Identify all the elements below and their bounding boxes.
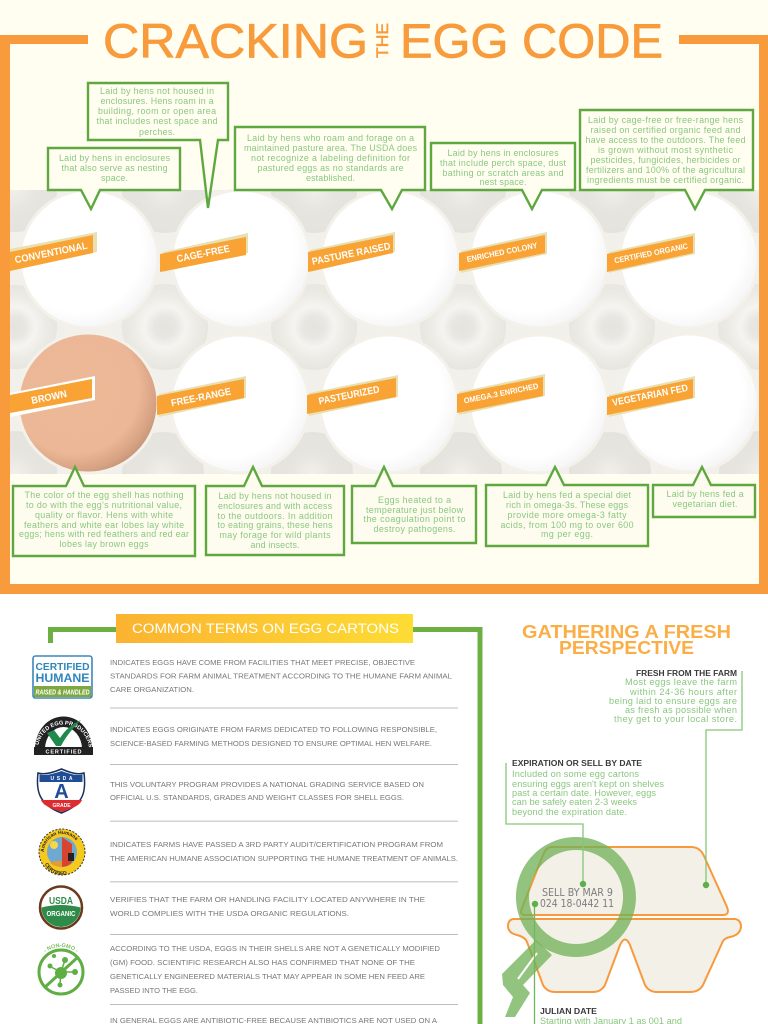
callout: free-range: and insects. [250,540,300,550]
icon: united egg producers certified: CERTIFIED [46,750,82,756]
text: fresh from the farm [609,669,737,724]
callout: cage-free: perches. [139,127,175,137]
ribbon: conventional: CONVENTIONAL [14,241,89,266]
callout: enriched colony: bathing or scratch areas and [442,168,564,178]
callout: certified organic: pesticides, fungicides, herbicides or [590,155,741,165]
heading: gathering a fresh perspective: GATHERING A FRESH [522,621,731,642]
callout: vegetarian fed: Laid by hens fed a [666,489,744,499]
text: fresh from the farm: Most eggs leave the farm [625,677,737,687]
heading: common terms on egg cartons: COMMON TERMS ON EGG CARTONS [132,621,399,636]
callout: pasture raised: established. [306,173,355,183]
icon: magnifying glass [502,837,636,1017]
title: CRACKING [103,16,368,68]
icon: non-gmo [38,943,84,996]
text: usda organic description: WORLD COMPLIES WITH THE USDA ORGANIC REGULATIONS. [110,909,349,918]
panel: common terms frame line [50,630,480,1024]
icon: certified humane: CERTIFIED [36,662,90,673]
text: expiration or sell by date: Included on some egg cartons [512,769,639,779]
callout: cage-free: building, room or open area [98,106,216,116]
text: united egg producers description: SCIENCE-BASED FARMING METHODS DESIGNED TO ENSURE OPTIMAL HEN WELFARE. [110,739,432,748]
text: fresh from the farm: they get to your local store. [614,714,737,724]
text: certified humane description: CARE ORGANIZATION. [110,685,194,694]
ribbon: free-range [157,376,246,417]
icon: american humane certified seal: CERTIFIED [45,863,66,875]
icon: united egg producers certified: UNITED EGG PRODUCERS [35,720,92,748]
ribbon: pasteurized [307,375,398,416]
title: EGG CODE [400,16,663,68]
callout: omega-3 enriched [486,467,648,546]
ribbon: vegetarian fed: VEGETARIAN FED [611,383,689,409]
callout: pasture raised: pastured eggs as no standards are [258,163,404,173]
callout: certified organic: ingredients must be certified organic. [587,175,744,185]
callout: cage-free: enclosures. Hens roam in a [100,96,214,106]
connector: julian date [532,901,538,1024]
text: usda organic description [110,895,425,918]
callout: pasture raised [235,127,425,209]
text: julian date: JULIAN DATE [540,1007,598,1016]
icon: usda grade a shield: GRADE [52,803,71,809]
callout: pasteurized: temperature just below [366,505,464,515]
callout: brown: lobes lay brown eggs [60,539,149,549]
text: carton date stamp [540,887,614,910]
ribbon: pasteurized: PASTEURIZED [318,384,381,408]
callout: certified organic [580,110,753,209]
ribbon: enriched colony [459,232,547,273]
heading: common terms on egg cartons [116,614,413,643]
text: non-gmo description: ACCORDING TO THE USDA, EGGS IN THEIR SHELLS ARE NOT A GENETICALLY MODIFIED [110,944,440,953]
orange frame [0,35,768,594]
callout: enriched colony: that include perch space, dust [440,158,567,168]
callout: pasture raised: Laid by hens who roam and forage on a [247,133,414,143]
text: fresh from the farm: FRESH FROM THE FARM [636,669,737,678]
ribbon: cage-free [160,233,248,272]
icon: certified humane [33,656,92,698]
callout: conventional: that also serve as nesting [62,163,168,173]
callout: brown: to do with the egg's nutritional value, [26,500,182,510]
callout: brown: The color of the egg shell has nothing [24,490,184,500]
icon: usda organic seal [40,886,82,928]
callout: free-range [206,467,344,555]
text: fresh from the farm: within 24-36 hours after [629,687,737,697]
ribbon: brown: BROWN [30,389,68,407]
text: carton date stamp: SELL BY MAR 9 [542,887,613,899]
text: certified humane description [110,658,452,694]
icon: certified humane: RAISED & HANDLED [36,690,90,696]
callout: enriched colony: Laid by hens in enclosures [448,148,559,158]
callout: enriched colony [431,143,575,209]
callout: brown: feathers and white ear lobes lay white [24,520,184,530]
callout: conventional: space. [101,173,128,183]
callout: free-range: Laid by hens not housed in [218,491,332,501]
text: united egg producers description: INDICATES EGGS ORIGINATE FROM FARMS DEDICATED TO FOLLOWING RESPONSIBLE, [110,725,437,734]
heading: gathering a fresh perspective [522,621,731,658]
ribbon: conventional [10,232,97,271]
ribbon: free-range: FREE-RANGE [170,386,232,409]
text: usda grade description: THIS VOLUNTARY PROGRAM PROVIDES A NATIONAL GRADING SERVICE BASED ON [110,780,424,789]
text: certified humane description: STANDARDS FOR FARM ANIMAL TREATMENT ACCORDING TO THE HUMANE FARM ANIMAL [110,672,452,680]
text: expiration or sell by date: EXPIRATION OR SELL BY DATE [512,759,643,768]
callout: certified organic: is grown without most synthetic [598,145,734,155]
callout: cage-free: that includes nest space and [96,116,218,126]
text: non-gmo description: GENETICALLY ENGINEERED MATERIALS THAT MAY APPEAR IN SOME HEN FEED ARE [110,972,425,981]
text: non-gmo description: PASSED INTO THE EGG. [110,986,198,995]
icon: american humane certified seal [38,828,86,876]
callout: free-range: enclosures and with access [218,501,333,511]
ribbon: certified organic [607,233,695,273]
callout: certified organic: have access to the outdoors. The feed [586,135,746,145]
callout: omega-3 enriched: Laid by hens fed a special diet [503,490,632,500]
ribbon: omega-3 enriched [457,374,545,415]
text: carton date stamp: 024 18-0442 11 [540,898,614,910]
text: usda grade description [110,780,424,802]
text: american humane description: INDICATES FARMS HAVE PASSED A 3RD PARTY AUDIT/CERTIFICATION PROGRAM FROM [110,840,443,849]
ribbon: cage-free: CAGE-FREE [176,244,231,265]
callout: conventional: Laid by hens in enclosures [59,153,171,163]
callout: pasteurized: Eggs heated to a [378,495,451,505]
callout: vegetarian fed: vegetarian diet. [672,499,738,509]
callout: pasteurized: destroy pathogens. [374,524,456,534]
text: expiration or sell by date: ensuring eggs aren't kept on shelves [512,779,664,789]
title: THE [373,23,392,58]
text: usda organic description: VERIFIES THAT THE FARM OR HANDLING FACILITY LOCATED ANYWHERE IN THE [110,895,425,904]
text: julian date [540,1007,682,1024]
icon: united egg producers certified [34,716,93,756]
text: expiration or sell by date: past a certain date. However, eggs [512,788,656,798]
callout: free-range: to eating grains, these hens [218,520,333,530]
callout: brown: quality or flavor. Hens with white [35,510,173,520]
callout: vegetarian fed [653,467,755,517]
ribbon: vegetarian fed [607,376,695,417]
text: american humane description [110,840,458,863]
callout: omega-3 enriched: mg per egg. [541,529,593,539]
callout: cage-free: Laid by hens not housed in [100,86,214,96]
icon: usda grade a shield: A [54,781,69,803]
callout: enriched colony: nest space. [480,177,526,187]
callout: pasture raised: maintained pasture area. The USDA does [244,143,418,153]
ribbon: pasture raised [308,232,395,272]
illustration: egg carton [508,847,741,992]
icon: non-gmo: - NON-GMO - [44,943,78,952]
icon: usda grade a shield: USDA [50,776,73,782]
callout: certified organic: Laid by cage-free or free-range hens [588,115,744,125]
text: expiration or sell by date: can be safely eaten 2-3 weeks [512,797,637,807]
callout: omega-3 enriched: provide more omega-3 fatty [508,510,627,520]
callout: omega-3 enriched: rich in omega-3s. These eggs [506,500,629,510]
panel: top section background [0,0,768,594]
text: united egg producers description [110,725,437,748]
callout: certified organic: raised on certified organic feed and [590,125,741,135]
ribbon: brown [10,376,95,417]
ribbon: enriched colony: ENRICHED COLONY [466,241,539,264]
heading: gathering a fresh perspective: PERSPECTIVE [559,637,694,658]
ribbon: omega-3 enriched: OMEGA.3 ENRICHED [463,381,539,405]
text: non-gmo description [110,944,440,995]
ribbon: pasture raised: PASTURE RAISED [311,241,392,268]
callout: pasteurized [352,467,476,543]
callout: cage-free [88,83,228,208]
ribbon: certified organic: CERTIFIED ORGANIC [613,242,689,265]
icon: usda grade a shield [37,769,85,813]
text: fresh from the farm: being laid to ensure eggs are [609,696,737,706]
callout: conventional [48,148,180,209]
callout: pasteurized: the coagulation point to [364,514,466,524]
text: usda grade description: OFFICIAL U.S. STANDARDS, GRADES AND WEIGHT CLASSES FOR SHELL EGGS. [110,793,404,802]
icon: american humane certified seal: American Humane [40,830,78,852]
callout: free-range: to the outdoors. In addition [218,511,333,521]
text: non-gmo description: (GM) FOOD. SCIENTIFIC RESEARCH ALSO HAS CONFIRMED THAT NONE OF THE [110,958,415,967]
text: fresh from the farm: as fresh as possible when [625,705,737,715]
callout: pasture raised: not recognize a labeling definition for [251,153,410,163]
callout: brown [13,467,195,556]
text: certified humane description: INDICATES EGGS HAVE COME FROM FACILITIES THAT MEET PRECISE, OBJECTIVE [110,658,415,667]
text: american humane description: THE AMERICAN HUMANE ASSOCIATION SUPPORTING THE HUMANE TREATMENT OF ANIMALS. [110,854,458,863]
panel: egg carton tray [10,190,759,474]
text: expiration or sell by date [512,759,664,817]
callout: certified organic: fertilizers and 100% of the agricultural [586,165,745,175]
connector: fresh from the farm [703,671,742,888]
icon: usda organic seal: ORGANIC [46,909,76,918]
eggs: twelve-cup carton contents [18,190,758,473]
callout: brown: eggs; hens with red feathers and red ear [19,529,189,539]
icon: usda organic seal: USDA [49,895,73,907]
icon: certified humane: HUMANE [36,673,90,685]
connector: expiration date [506,763,586,887]
callout: omega-3 enriched: acids, from 100 mg to over 600 [500,520,634,530]
text: expiration or sell by date: beyond the expiration date. [512,807,627,817]
title [103,16,663,68]
callout: free-range: may forage for wild plants [220,530,331,540]
